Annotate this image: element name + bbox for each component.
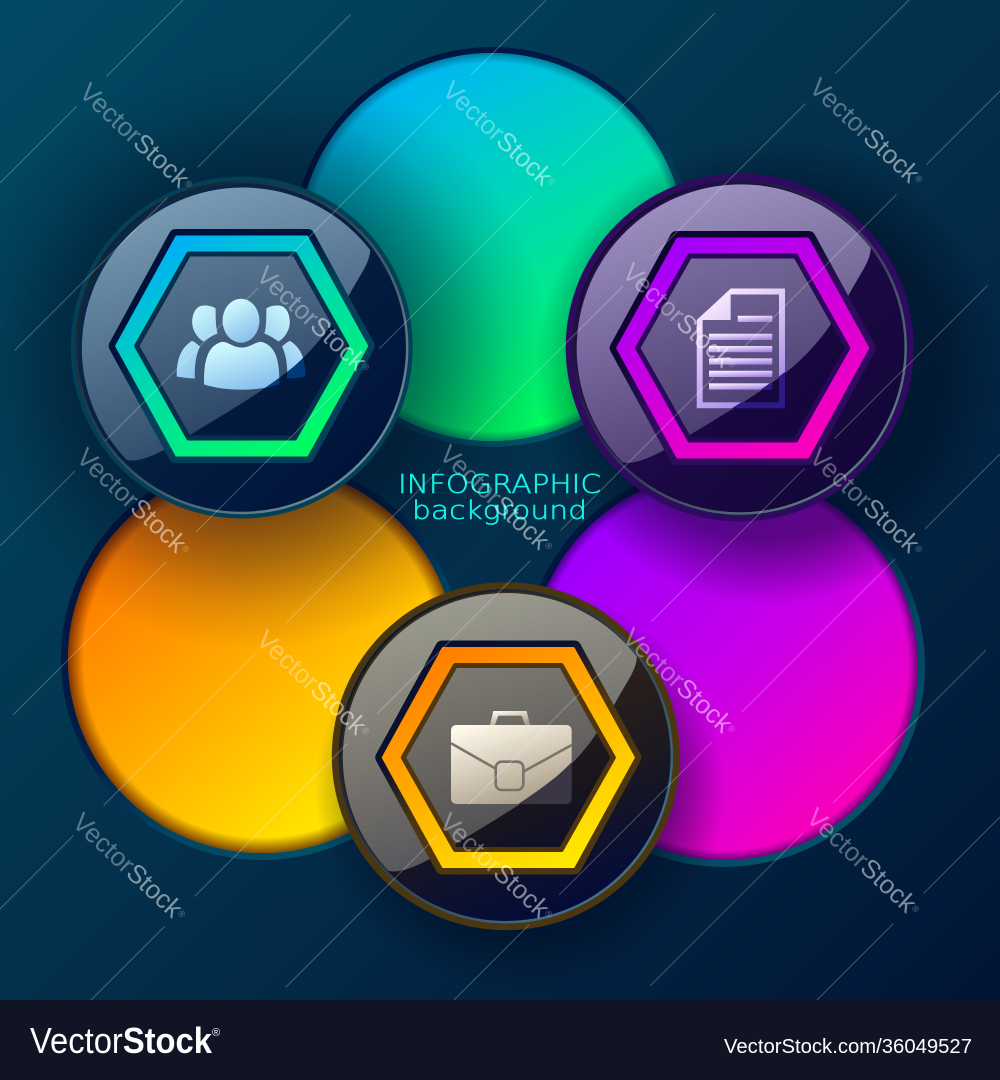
footer logo: VectorStock — [30, 1020, 213, 1061]
watermark text: VectorStock — [74, 77, 196, 193]
shadow: document badge — [535, 135, 1000, 605]
watermark text: ® — [913, 173, 925, 185]
watermark text: VectorStock — [251, 624, 373, 740]
watermark text: ® — [360, 725, 372, 737]
watermark text: ® — [543, 540, 555, 552]
watermark text: VectorStock — [71, 442, 193, 558]
badge: briefcase — [332, 582, 680, 930]
shadow: briefcase badge — [315, 585, 725, 995]
watermark text: VectorStock — [437, 75, 559, 191]
watermark text: ® — [913, 543, 925, 555]
footer bar — [0, 1000, 1000, 1080]
hexagon frame: orange to yellow — [382, 648, 634, 868]
watermark text: ® — [910, 903, 922, 915]
watermark text: VectorStock — [801, 802, 923, 918]
circle: green top — [292, 47, 692, 447]
watermark text: VectorStock — [434, 807, 556, 923]
title: infographic background: INFOGRAPHIC — [398, 470, 601, 500]
watermark text: ® — [360, 361, 372, 373]
watermark text: VectorStock — [617, 257, 739, 373]
watermark text: VectorStock — [804, 72, 926, 188]
watermark text: ® — [176, 908, 188, 920]
watermark text: VectorStock — [434, 439, 556, 555]
watermark text: ® — [183, 178, 195, 190]
watermark text: VectorStock — [804, 442, 926, 558]
badge: people — [71, 176, 413, 518]
hexagon frame: blue to green — [116, 236, 368, 456]
watermark text: VectorStock — [251, 260, 373, 376]
watermark text: ® — [180, 543, 192, 555]
circle: orange left — [61, 458, 463, 860]
watermark text — [67, 72, 931, 928]
circle: purple right — [523, 465, 925, 867]
watermark text: VectorStock — [617, 622, 739, 738]
badge: document — [566, 174, 914, 522]
title: infographic background — [398, 470, 601, 526]
icon: briefcase — [451, 711, 572, 804]
footer logo: ® — [212, 1027, 220, 1039]
watermark text: ® — [546, 176, 558, 188]
watermark text: VectorStock — [67, 807, 189, 923]
icon: people group — [177, 299, 305, 390]
watermark text: ® — [543, 908, 555, 920]
icon: document — [697, 288, 785, 408]
title: infographic background: background — [412, 496, 587, 526]
footer image id: VectorStock.com/36049527 — [724, 1036, 972, 1058]
watermark text: ® — [726, 723, 738, 735]
shadow: people badge — [0, 60, 550, 650]
watermark text: ® — [726, 358, 738, 370]
hexagon frame: purple to magenta — [617, 238, 869, 458]
